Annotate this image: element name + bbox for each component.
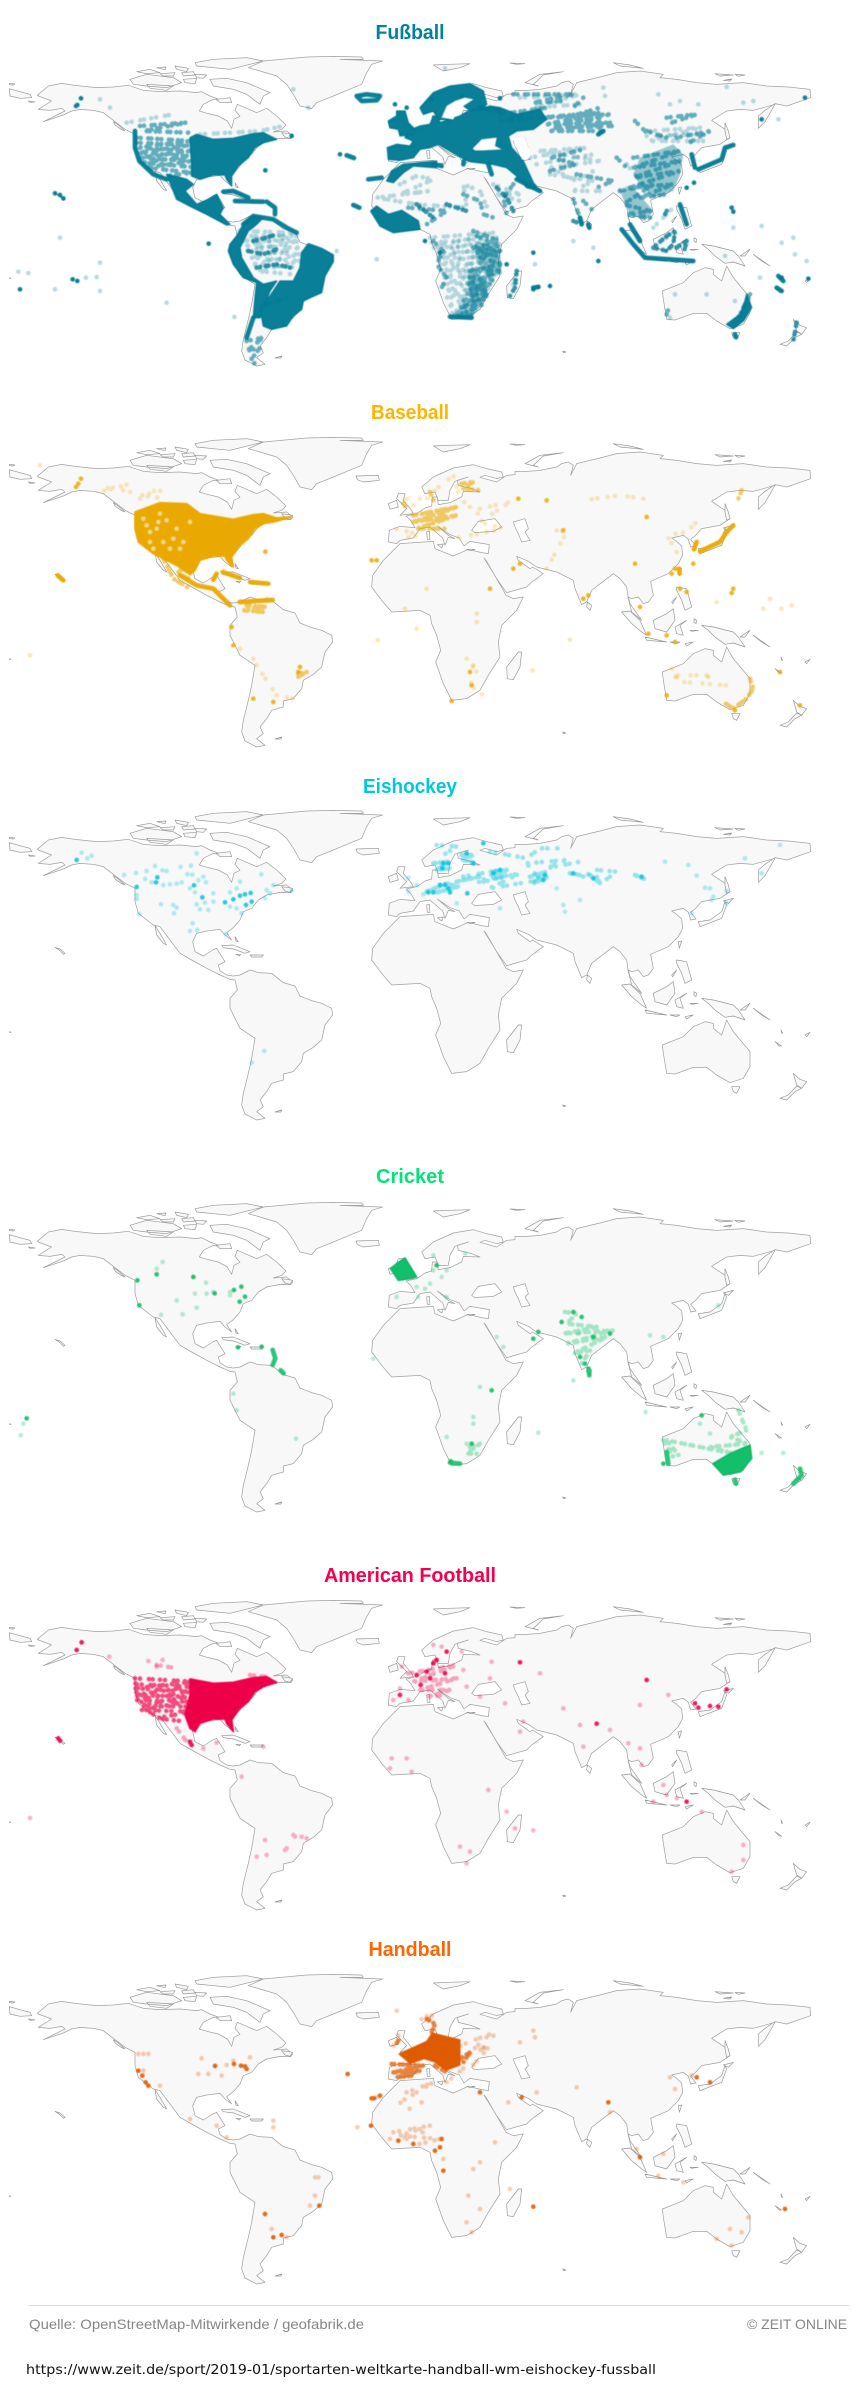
panel: American Football bbox=[9, 1565, 811, 1910]
dots: handball courts bbox=[138, 2011, 785, 2246]
copyright: © ZEIT ONLINE bbox=[747, 2316, 847, 2332]
panel: Eishockey bbox=[9, 776, 811, 1120]
title: Eishockey: Eishockey bbox=[363, 776, 458, 798]
dots: cricket grounds bbox=[21, 1254, 802, 1484]
dots: ice hockey rinks bbox=[77, 843, 780, 1063]
panel: Fußball bbox=[9, 22, 811, 366]
panel: Cricket bbox=[9, 1166, 811, 1512]
title: Handball: Handball bbox=[368, 1939, 452, 1961]
world map with cricket grounds bbox=[9, 1202, 811, 1512]
title: Fußball: Fußball bbox=[376, 22, 444, 44]
world map with handball courts bbox=[9, 1974, 811, 2284]
source note: Quelle: OpenStreetMap-Mitwirkende / geofabrik.de bbox=[29, 2316, 364, 2332]
footer divider bbox=[29, 2305, 849, 2306]
panel: Baseball bbox=[9, 402, 811, 747]
world map with American football fields bbox=[9, 1600, 811, 1910]
title: American Football: American Football bbox=[324, 1565, 496, 1587]
source URL: https://www.zeit.de/sport/2019-01/sportarten-weltkarte-handball-wm-eishockey-fussball bbox=[26, 2363, 656, 2378]
world map with football pitches bbox=[9, 56, 811, 366]
world map with ice hockey rinks bbox=[9, 810, 811, 1120]
dots: American football fields bbox=[30, 1642, 743, 1872]
title: Cricket: Cricket bbox=[376, 1166, 444, 1188]
dots: baseball fields bbox=[30, 465, 800, 710]
world map with baseball fields bbox=[9, 437, 811, 747]
panel: Handball bbox=[9, 1939, 811, 2284]
title: Baseball: Baseball bbox=[371, 402, 449, 424]
dots: football pitches bbox=[18, 68, 808, 364]
